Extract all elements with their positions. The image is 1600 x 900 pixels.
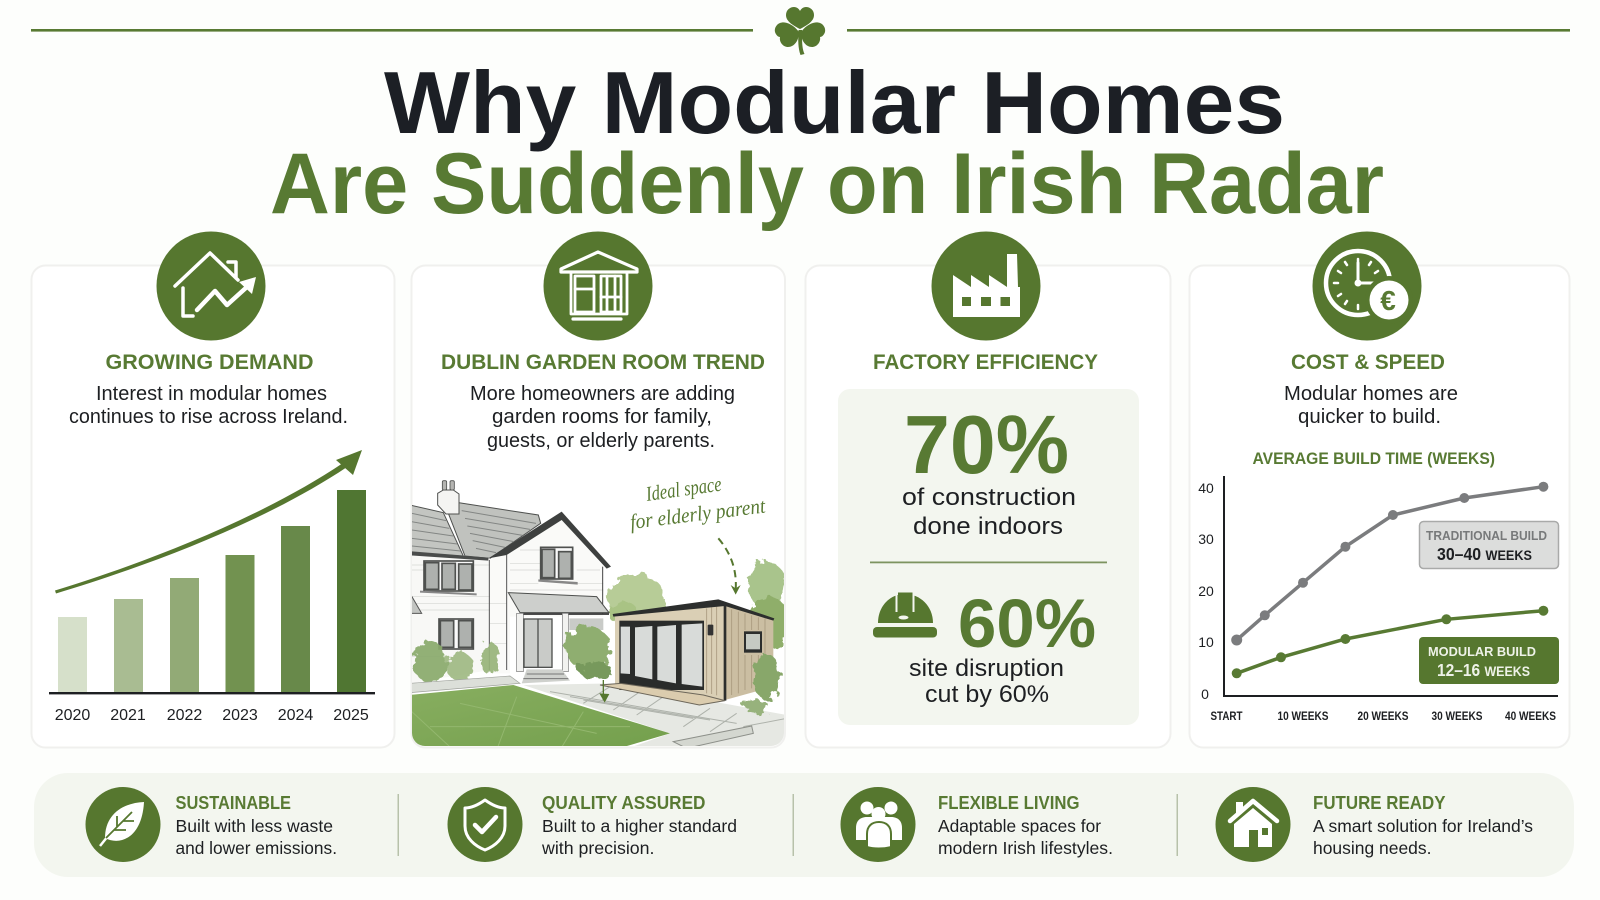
body text: Interest in modular homes	[96, 383, 327, 405]
line chart	[1198, 476, 1559, 723]
bar chart: 2023	[222, 707, 258, 724]
roof	[410, 505, 463, 556]
deck	[600, 683, 725, 705]
heading: FACTORY EFFICIENCY	[873, 351, 1098, 374]
item: quality assured: Built to a higher standard	[542, 816, 737, 836]
body text: More homeowners are adding	[470, 383, 735, 405]
stat label: disruption: site disruption	[909, 655, 1064, 682]
line chart: 40	[1198, 480, 1214, 496]
icon: hard hat	[873, 592, 937, 638]
line chart: START	[1210, 711, 1242, 723]
bar chart: 2024	[278, 707, 313, 724]
line chart: 40 WEEKS	[1505, 711, 1556, 723]
item: sustainable	[86, 787, 337, 862]
icon: clock and euro: €	[1380, 285, 1396, 316]
panel: Dublin garden room trend	[410, 232, 790, 750]
bar chart: 2020	[55, 707, 90, 724]
stat label: construction: done indoors	[913, 513, 1063, 540]
right tree	[746, 558, 784, 650]
bar chart: 2021	[110, 707, 146, 724]
item: flexible living: Adaptable spaces for	[938, 816, 1101, 836]
heading: DUBLIN GARDEN ROOM TREND	[441, 351, 765, 374]
arrow: growth curve	[55, 450, 362, 594]
callout: traditional build	[1420, 522, 1558, 568]
middle shrub	[566, 627, 612, 678]
stat label: construction: of construction	[902, 484, 1076, 511]
stat: 60%: 60%	[958, 585, 1096, 662]
callout: modular build	[1419, 637, 1559, 684]
heading: GROWING DEMAND	[106, 351, 314, 374]
stat box	[838, 389, 1139, 725]
dashed arrow	[718, 538, 736, 590]
chart title: AVERAGE BUILD TIME (WEEKS)	[1252, 449, 1495, 468]
left shrubs	[413, 641, 499, 682]
item: future ready	[1216, 787, 1533, 862]
item: sustainable: Built with less waste	[176, 816, 333, 836]
porch	[508, 593, 609, 613]
item: quality assured: QUALITY ASSURED	[542, 793, 706, 813]
body text: continues to rise across Ireland.	[69, 406, 348, 428]
steps	[522, 669, 570, 683]
line chart: 0	[1201, 686, 1209, 702]
series: modular build	[1232, 606, 1548, 678]
small arrow	[602, 680, 604, 700]
gable and eaves	[488, 512, 611, 569]
body text	[470, 383, 735, 452]
item: sustainable: and lower emissions.	[176, 838, 337, 858]
item: future ready: housing needs.	[1313, 838, 1432, 858]
back tree	[608, 574, 665, 625]
handwritten note: for elderly parent	[629, 493, 768, 534]
footer band	[34, 773, 1574, 877]
line chart: 30	[1198, 531, 1214, 547]
windows	[424, 547, 573, 649]
paving	[523, 683, 787, 750]
item: future ready: A smart solution for Ireland’s	[1313, 816, 1533, 836]
panel: growing demand	[32, 232, 394, 748]
stat: 70%: 70%	[904, 398, 1069, 491]
panel: factory efficiency	[806, 232, 1170, 748]
item: flexible living: FLEXIBLE LIVING	[938, 793, 1080, 813]
garden room	[615, 605, 725, 700]
series: traditional build	[1231, 482, 1548, 646]
item: quality assured: with precision.	[541, 838, 654, 858]
chimney	[438, 490, 459, 514]
line chart: 30 WEEKS	[1432, 711, 1483, 723]
item: sustainable: SUSTAINABLE	[176, 793, 291, 813]
line chart: 20 WEEKS	[1358, 711, 1409, 723]
title: Are Suddenly on Irish Radar	[270, 136, 1384, 232]
body text: garden rooms for family,	[492, 406, 712, 428]
item: quality assured	[448, 787, 737, 862]
line chart: 20	[1198, 583, 1214, 599]
walls	[410, 556, 490, 683]
callout: modular build: 12–16 WEEKS	[1437, 660, 1530, 680]
callout: modular build: MODULAR BUILD	[1428, 644, 1536, 659]
icon: shamrock	[775, 7, 825, 55]
lawn	[410, 685, 670, 750]
item: future ready: FUTURE READY	[1313, 793, 1446, 813]
panel: cost and speed	[1190, 232, 1570, 748]
title: Why Modular Homes	[384, 53, 1285, 152]
icon: house with rising arrow	[156, 232, 266, 340]
handwritten note: Ideal space	[644, 472, 723, 506]
item: flexible living: modern Irish lifestyles.	[938, 838, 1113, 858]
line chart: 10 WEEKS	[1278, 711, 1329, 723]
bar chart: 2025	[333, 707, 369, 724]
illustration: house and garden room	[410, 481, 790, 750]
stat label: disruption	[909, 655, 1064, 708]
heading: COST & SPEED	[1291, 351, 1445, 374]
body text	[1284, 383, 1458, 428]
body text: quicker to build.	[1298, 406, 1441, 428]
stat label: disruption: cut by 60%	[925, 681, 1049, 708]
icon: factory	[932, 232, 1040, 340]
bar chart	[49, 490, 375, 724]
bar chart: 2022	[167, 707, 202, 724]
handwritten note	[629, 472, 768, 534]
callout: traditional build: 30–40 WEEKS	[1437, 544, 1532, 564]
icon: clock and euro	[1312, 232, 1422, 340]
icon: garden room	[544, 232, 652, 340]
item: flexible living	[840, 787, 1113, 862]
right shrub	[744, 653, 779, 713]
callout: traditional build: TRADITIONAL BUILD	[1426, 528, 1547, 543]
line chart: 10	[1198, 634, 1214, 650]
title	[270, 53, 1384, 232]
header ornament: rules and shamrock	[31, 7, 1570, 55]
body text: guests, or elderly parents.	[487, 430, 715, 452]
stat label: construction	[902, 484, 1076, 540]
body text	[69, 383, 348, 428]
body text: Modular homes are	[1284, 383, 1458, 405]
